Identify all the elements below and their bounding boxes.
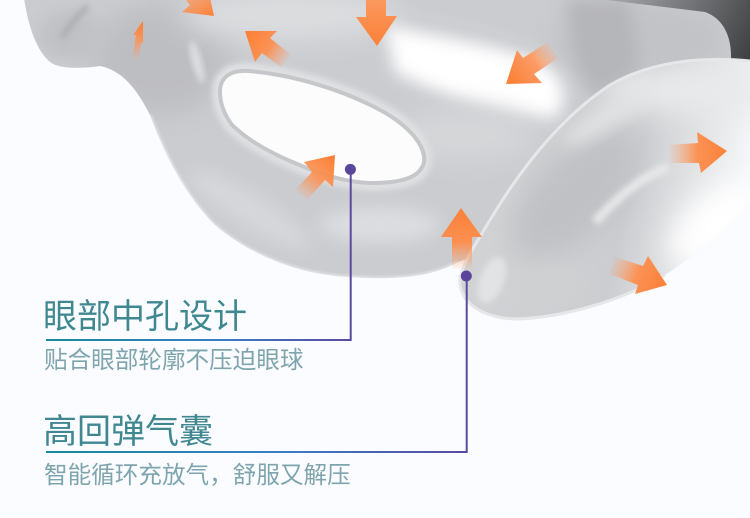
- cushion rim: [460, 59, 750, 319]
- arrow: up near cushion: [441, 208, 482, 270]
- text: air cushion description: 智能循环充放气，舒服又解压: [44, 462, 351, 489]
- arrow: top clipped: [182, 0, 214, 16]
- dark strap behind mask: [585, 0, 750, 64]
- callout dot: air cushion: [461, 270, 472, 282]
- callout dot: eye hole: [345, 164, 356, 175]
- heading: air cushion: 高回弹气囊: [43, 413, 213, 451]
- right air cushion: [460, 59, 750, 319]
- cushion shading: [602, 63, 710, 118]
- text: eye hole description: 贴合眼部轮廓不压迫眼球: [44, 347, 304, 374]
- mask shading: [90, 5, 230, 115]
- heading: eye hole: 眼部中孔设计: [43, 298, 247, 336]
- arrow: upper right of hole: [506, 42, 558, 84]
- arrow: top centre: [356, 0, 397, 46]
- arrow: cushion right: [669, 132, 727, 173]
- arrow: cushion bottom: [610, 256, 667, 294]
- eye hole: [222, 73, 422, 181]
- callout line: eye hole: [46, 170, 351, 340]
- arrow: eye hole bottom: [295, 155, 335, 200]
- bright highlight: [385, 25, 563, 118]
- arrow: upper left of hole: [245, 31, 291, 67]
- eye mask body: [24, 0, 731, 278]
- callout line: air cushion: [46, 276, 467, 452]
- arrow: top left small: [132, 21, 143, 60]
